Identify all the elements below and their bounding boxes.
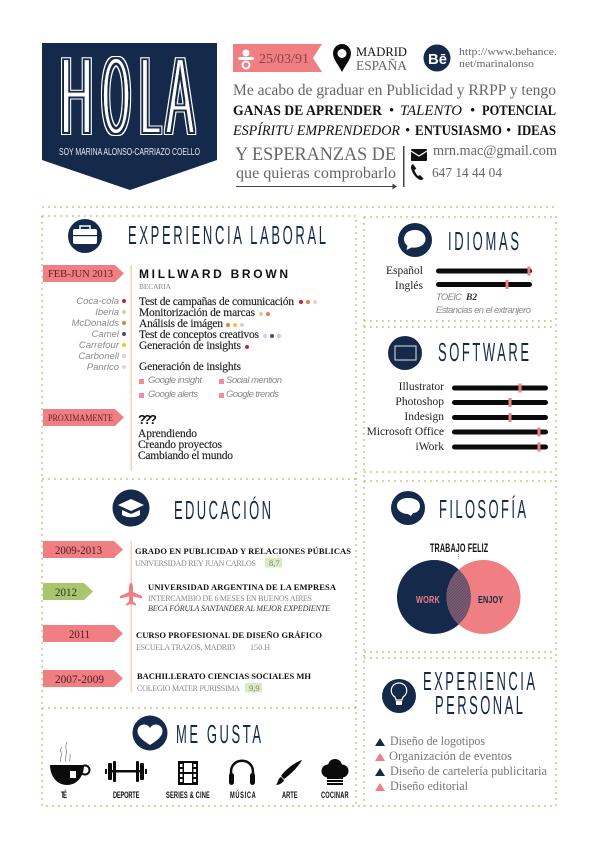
icon: graduation cap: [112, 490, 150, 526]
list: Diseño de cartelería publicitaria: [390, 764, 547, 778]
title: HOLA: O: [102, 35, 130, 159]
notes: Estancias en el extranjero: [436, 305, 531, 316]
notes: B2: [465, 293, 477, 303]
intro text: •: [470, 103, 475, 119]
icon: headphones: [229, 761, 255, 785]
task list: Monitorización de marcas: [139, 307, 256, 319]
panel: filosofia: [391, 491, 526, 634]
entry 3: [136, 630, 322, 652]
icon: light bulb: [382, 679, 416, 713]
panel: experiencia laboral: [43, 219, 326, 471]
list: [375, 734, 547, 793]
entry 2: INTERCAMBIO DE 6 MESES EN BUENOS AIRES: [148, 594, 312, 603]
skill bars: [436, 266, 532, 289]
heading: SOFTWARE: [438, 338, 529, 367]
labels: Indesign: [404, 411, 444, 423]
label: MÚSICA: [230, 790, 256, 800]
labels: [386, 265, 424, 292]
intro text: ESPÍRITU EMPRENDEDOR: [232, 122, 400, 139]
insights tools: [139, 375, 282, 400]
label: COCINAR: [321, 790, 349, 800]
location text: MADRID: [356, 44, 407, 59]
date ribbon: [43, 265, 124, 282]
intro text: •: [405, 123, 410, 139]
ribbon 2011: [43, 625, 123, 642]
icon: paintbrush: [276, 760, 302, 785]
entry 3: CURSO PROFESIONAL DE DISEÑO GRÁFICO: [136, 630, 322, 640]
entry 4: COLEGIO MATER PURISSIMA: [137, 684, 240, 693]
icon: laptop: [388, 336, 422, 370]
icon: speech bubble: [398, 223, 432, 257]
upcoming list: Aprendiendo: [138, 428, 197, 440]
skill bars: [452, 384, 548, 452]
upcoming list: Cambiando el mundo: [138, 450, 233, 462]
heading: IDIOMAS: [448, 227, 519, 256]
icon: tea cup: [50, 742, 90, 785]
date text: 25/03/91: [259, 52, 309, 67]
contact divider: [403, 146, 404, 187]
insights tools: Google insight: [148, 375, 202, 386]
intro text: •: [389, 103, 394, 119]
icon: behance: Bē: [428, 51, 447, 68]
date ribbon: FEB-JUN 2013: [48, 269, 113, 280]
client list: Carrefour: [79, 340, 120, 351]
ribbon 2007-2009: [43, 670, 123, 687]
intro text: que quieras comprobarlo: [236, 165, 396, 182]
proximamente ribbon: PROXIMAMENTE: [48, 413, 113, 423]
ribbon 2011: 2011: [69, 627, 90, 641]
labels: Photoshop: [395, 396, 444, 408]
task list: Test de campañas de comunicación: [139, 296, 294, 308]
title: HOLA: L: [140, 34, 161, 159]
client list: Iberia: [95, 307, 119, 318]
entry 2: BECA FÓRULA SANTANDER AL MEJOR EXPEDIENTE: [148, 603, 330, 613]
insights heading: Generación de insights: [139, 361, 242, 373]
icon: mail: [411, 149, 427, 161]
labels: iWork: [416, 441, 444, 453]
intro text: POTENCIAL: [482, 103, 556, 119]
panel: me gusta: [50, 716, 349, 800]
heading: PERSONAL: [435, 691, 523, 720]
insights tools: Google trends: [226, 389, 279, 400]
entry 3: 150 H: [250, 643, 270, 652]
entry 3: ESCUELA TRAZOS, MADRID: [136, 643, 235, 652]
icon: brain: [391, 491, 425, 525]
labels: Illustrator: [399, 381, 444, 393]
subtitle: name: SOY MARINA ALONSO-CARRIAZO COELLO: [59, 145, 200, 157]
ribbon 2012: 2012: [55, 585, 77, 599]
task list: Generación de insights: [139, 340, 242, 352]
timeline: [130, 541, 132, 692]
role: BECARIA: [139, 282, 172, 291]
panel: idiomas: [386, 223, 532, 316]
venn diagram: ENJOY: [478, 594, 503, 605]
client list: McDonalds: [71, 318, 119, 329]
intro text: ENTUSIASMO: [415, 123, 502, 139]
labels: Inglés: [395, 280, 424, 292]
upcoming list: [138, 428, 233, 462]
location: [333, 44, 407, 72]
birth date ribbon: [233, 44, 322, 72]
venn label: TRABAJO FELIZ: [430, 542, 488, 556]
task list: Test de conceptos creativos: [139, 329, 260, 341]
task list: Análisis de imágen: [139, 318, 223, 330]
upcoming list: Creando proyectos: [138, 439, 223, 451]
venn diagram: [397, 560, 520, 634]
panel dividers: [42, 207, 556, 806]
client dots: [122, 299, 126, 369]
icon: briefcase: [68, 219, 102, 253]
insights tools: Google alerts: [148, 389, 198, 400]
client list: Coca-cola: [76, 296, 119, 307]
intro text: IDEAS: [517, 123, 556, 139]
heading: EXPERIENCIA: [423, 667, 535, 696]
icon: plane: [120, 583, 142, 606]
entry 1: 8,7: [269, 558, 280, 568]
timeline: [130, 265, 132, 471]
label: SERIES & CINE: [166, 790, 210, 800]
notes: TOEIC: [436, 292, 462, 303]
client list: Carbonell: [78, 351, 120, 362]
intro text: GANAS DE APRENDER: [233, 103, 382, 119]
ribbon 2012: [43, 583, 93, 600]
phone number: 647 14 44 04: [432, 165, 502, 180]
labels: Español: [386, 265, 423, 277]
heading: EXPERIENCIA LABORAL: [128, 221, 326, 250]
label: ARTE: [282, 790, 298, 800]
location country: ESPAÑA: [356, 58, 408, 74]
company: MILLWARD BROWN: [139, 267, 288, 281]
entry 4: [137, 671, 311, 693]
title: HOLA: [60, 33, 194, 159]
ribbon 2007-2009: 2007-2009: [55, 672, 104, 686]
heading: ME GUSTA: [176, 720, 261, 749]
client list: Panrico: [87, 362, 119, 373]
entry 1: [135, 546, 351, 568]
entry 1: GRADO EN PUBLICIDAD Y RELACIONES PÚBLICAS: [135, 546, 351, 556]
icon: pacifier: [238, 50, 254, 68]
behance link: net/marinalonso: [459, 58, 535, 70]
icon: chef hat: [322, 759, 348, 785]
icon: film strip: [178, 761, 198, 785]
panel: experiencia personal: [375, 667, 547, 793]
task list: [139, 296, 294, 352]
ribbon 2009-2013: [43, 541, 123, 558]
behance link: [424, 44, 557, 72]
title: HOLA: H: [60, 33, 92, 158]
entry 2: UNIVERSIDAD ARGENTINA DE LA EMPRESA: [148, 582, 337, 592]
labels: Microsoft Office: [367, 426, 444, 438]
heading: EDUCACIÓN: [174, 496, 271, 525]
icon: map pin: [333, 44, 351, 72]
notes: [436, 292, 531, 316]
labels: [367, 381, 444, 453]
venn diagram: WORK: [416, 594, 440, 605]
heading: [423, 667, 535, 720]
list: Diseño de logotipos: [390, 734, 485, 748]
email: mrn.mac@gmail.com: [433, 143, 557, 159]
icon: heart: [132, 716, 168, 750]
intro text: Me acabo de graduar en Publicidad y RRPP y tengo: [233, 82, 556, 99]
intro text: •: [506, 123, 511, 139]
icon: phone: [411, 164, 424, 180]
entry 4: BACHILLERATO CIENCIAS SOCIALES MH: [137, 671, 311, 681]
insights tools: Social mention: [226, 375, 282, 386]
ribbon 2009-2013: 2009-2013: [55, 543, 102, 557]
proximamente ribbon: [43, 409, 124, 426]
panel: educacion: [43, 490, 351, 693]
leader line: [458, 554, 460, 560]
client list: [71, 296, 120, 373]
client list: Camel: [92, 329, 120, 340]
entry 2: [148, 582, 337, 613]
arrow: [236, 184, 396, 188]
url text: http://www.behance.: [459, 46, 557, 58]
label: TÉ: [61, 790, 67, 800]
icon: dumbbell: [105, 761, 147, 782]
heading: FILOSOFÍA: [439, 495, 526, 524]
label: DEPORTE: [113, 790, 139, 800]
list: Diseño editorial: [390, 779, 468, 793]
list: Organización de eventos: [389, 749, 512, 763]
intro text: [232, 82, 556, 182]
entry 1: UNIVERSIDAD REY JUAN CARLOS: [135, 559, 256, 568]
entry 4: 9,9: [249, 683, 260, 693]
header banner: HOLA: [42, 33, 217, 190]
title: HOLA: A: [166, 34, 194, 158]
intro text: Y ESPERANZAS DE: [235, 144, 396, 165]
task dots: [226, 300, 317, 349]
upcoming title: ???: [138, 412, 157, 427]
panel: software: [367, 336, 548, 453]
intro text: TALENTO: [400, 103, 462, 119]
